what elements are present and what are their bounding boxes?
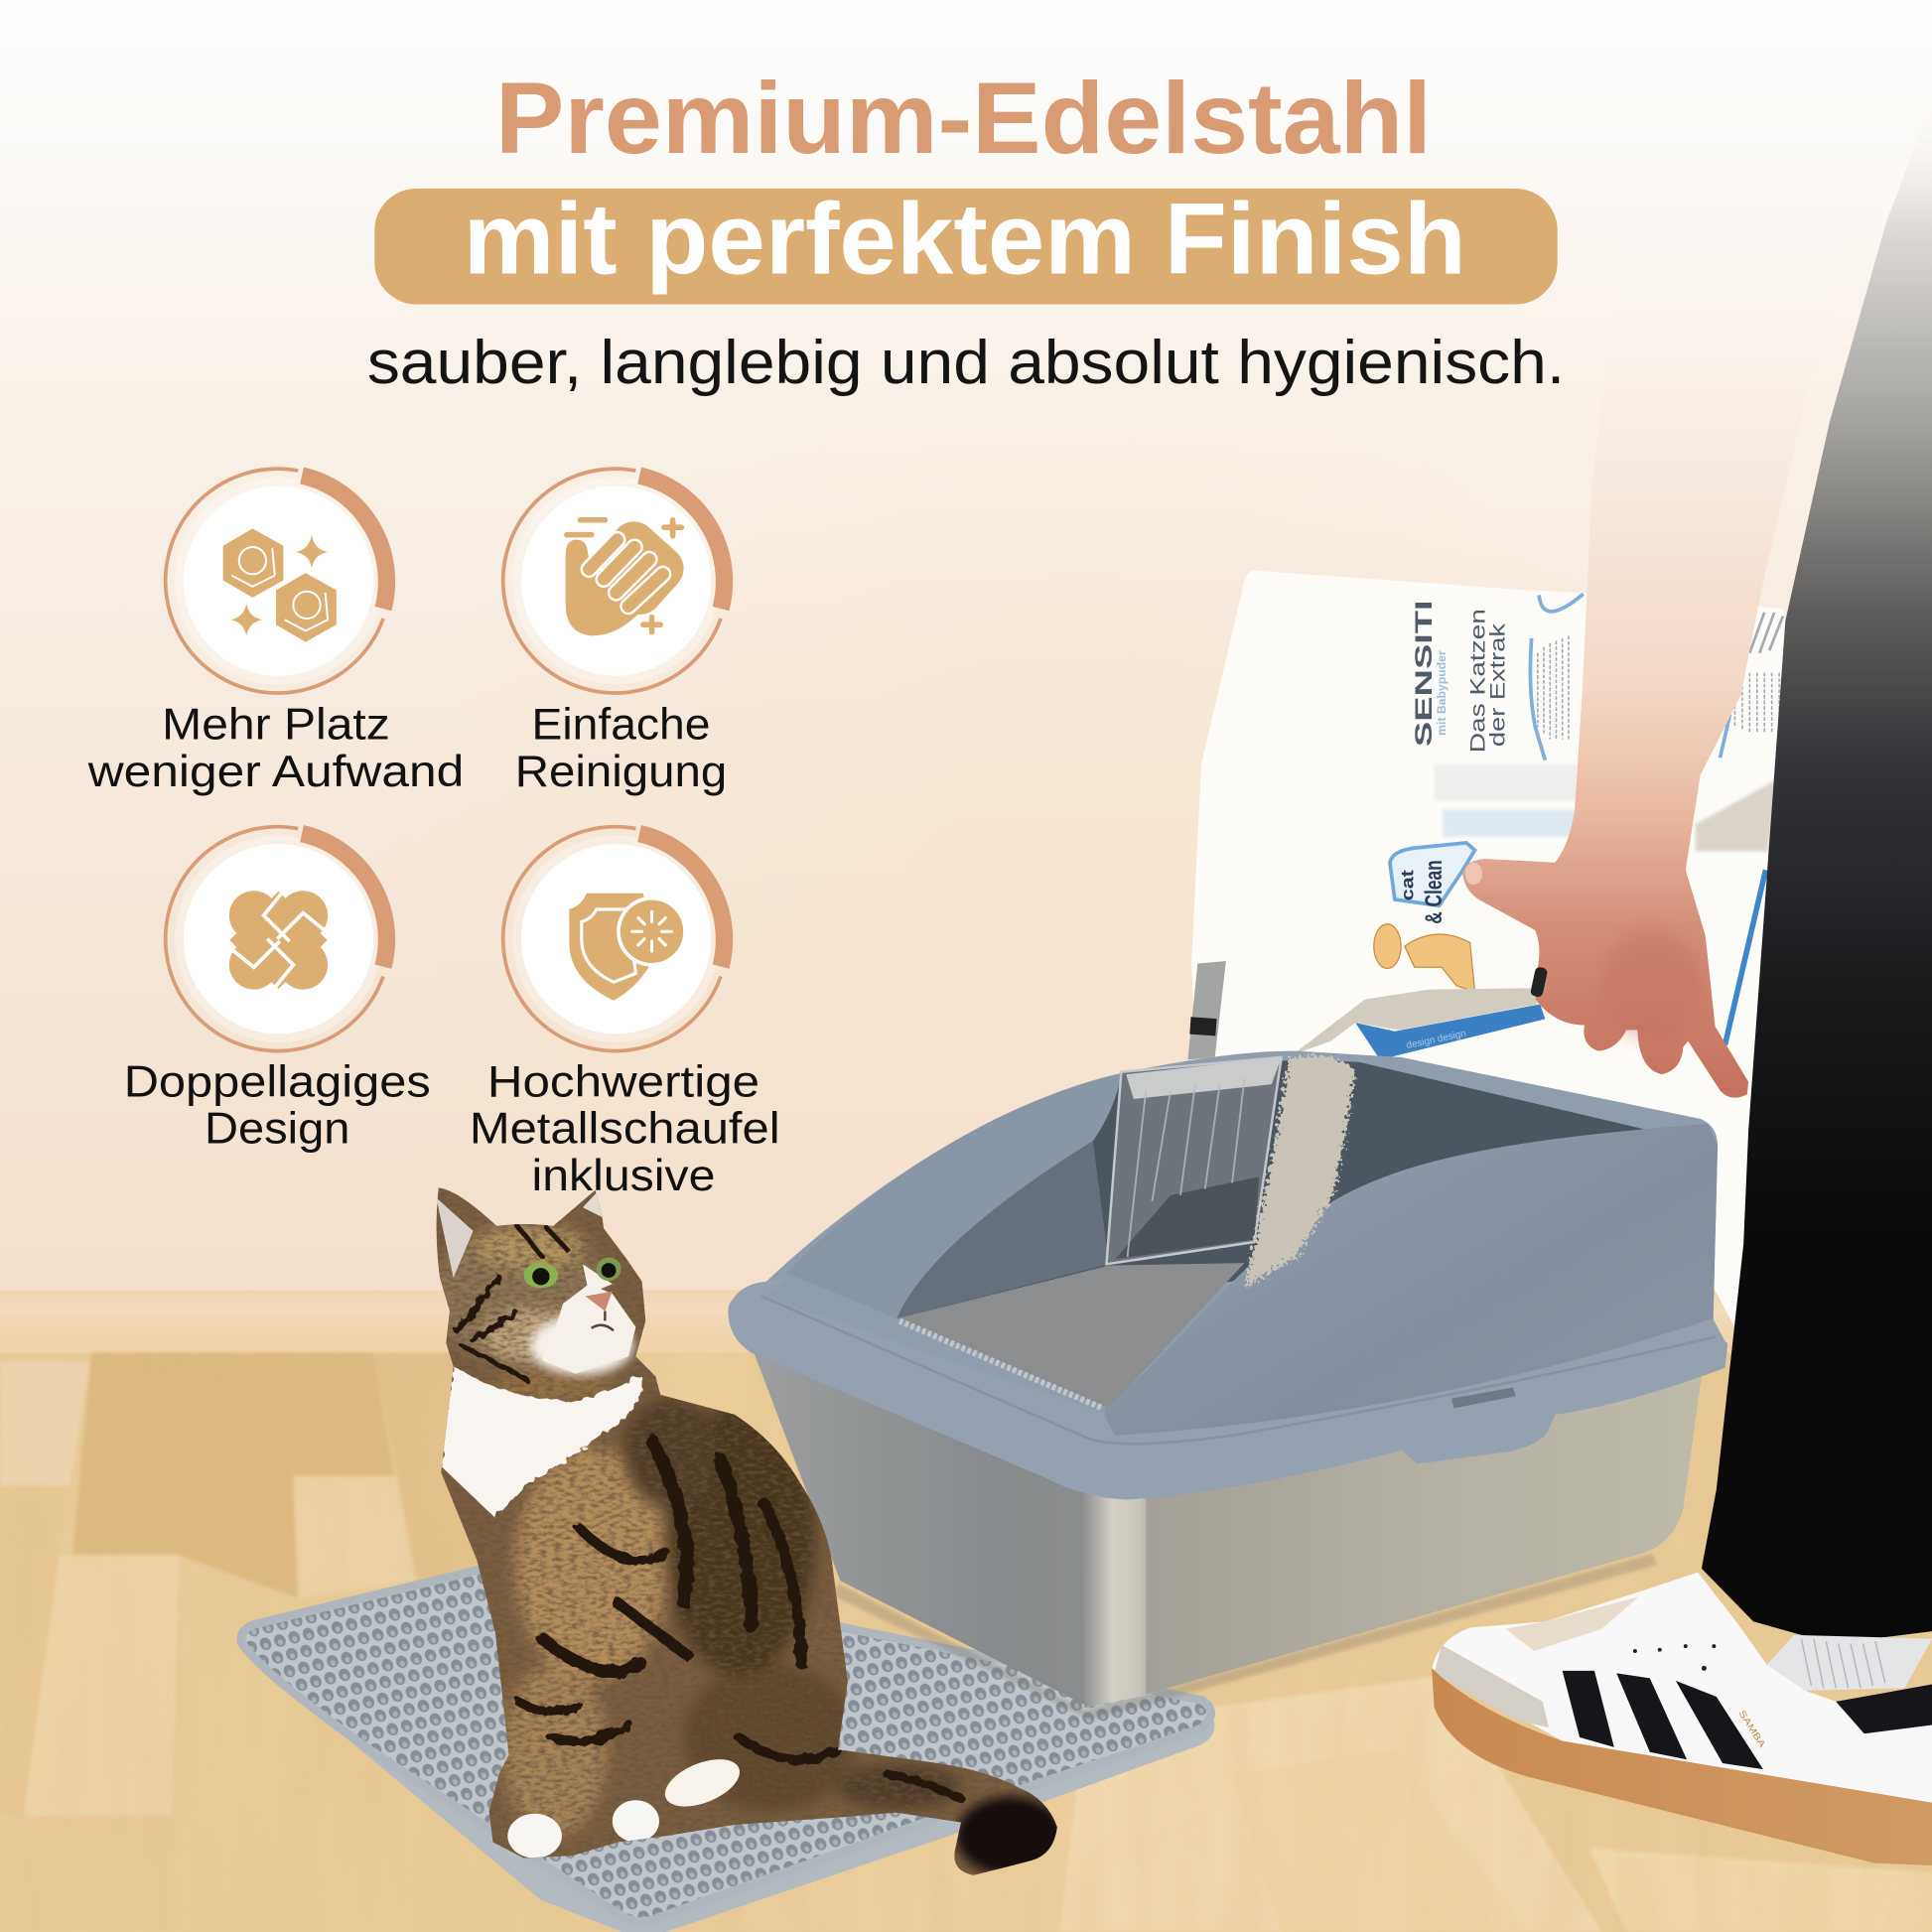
weave gaps <box>228 890 329 991</box>
sneaker sock <box>1767 1635 1932 1691</box>
bag printed brand text <box>1411 600 1509 753</box>
icon: shield with citrus badge <box>569 894 685 1001</box>
cat fur shading <box>431 1225 961 1836</box>
scoop shiny tines <box>1126 1057 1282 1099</box>
lid outer <box>728 1051 1727 1499</box>
white paws <box>507 1814 562 1859</box>
steel base left face <box>755 1353 1097 1708</box>
sneaker <box>1432 1573 1932 1865</box>
label: Doppellagiges <box>124 1058 431 1107</box>
bag printed brand text: mit Babypuder <box>1435 650 1449 736</box>
palm <box>566 540 647 635</box>
lid interior left lighter wall <box>897 1141 1109 1318</box>
person trousers <box>1702 102 1932 1644</box>
sneaker upper <box>1432 1573 1932 1803</box>
label: Einfache <box>532 701 710 750</box>
bag sand heap <box>1293 988 1538 1054</box>
background: wall <box>0 0 1932 1307</box>
tagline: sauber, langlebig und absolut hygienisch. <box>367 329 1565 397</box>
cat and clean logo: & Clean <box>1421 860 1447 924</box>
white muzzle <box>542 1284 635 1374</box>
litter box <box>728 961 1727 1721</box>
lid hood inner band <box>786 1074 1121 1318</box>
bag blue edge line <box>1725 870 1765 1044</box>
icon: hexagon nuts and sparkles <box>223 528 337 642</box>
lid clip slot <box>1451 1387 1516 1409</box>
hand shading <box>1601 929 1701 1042</box>
bag printed brand text: der Extrak <box>1486 622 1509 747</box>
bag body <box>1191 571 1790 1082</box>
lid interior dark wall <box>897 1059 1652 1318</box>
cloth <box>581 512 693 623</box>
bag label bands <box>1435 763 1578 837</box>
sneaker heel tab <box>1836 1685 1932 1733</box>
label second line: Reinigung <box>515 748 727 796</box>
label third line: inklusive <box>532 1152 715 1200</box>
mat top layer <box>241 1570 1211 1922</box>
scoop handle <box>1187 961 1226 1059</box>
background: skirting board <box>0 1290 1932 1354</box>
mat lower layer <box>241 1651 1214 1932</box>
feature: Doppellagiges Design <box>124 827 431 1154</box>
door mat <box>241 1570 1214 1932</box>
litter bag <box>1191 571 1790 1082</box>
label second line: Metallschaufel <box>470 1105 780 1154</box>
white backdrop behind the bag <box>1191 571 1790 1355</box>
bag blue stripes and small print <box>1530 594 1729 760</box>
cartoon cat on bag <box>1374 924 1475 992</box>
feature: Hochwertige Metallschaufel <box>470 827 780 1200</box>
icon: hand wiping with cloth <box>566 512 693 635</box>
icon: woven knot <box>228 890 329 991</box>
bag sand showing through <box>1696 778 1778 852</box>
bag printed brand text: Das Katzen <box>1466 609 1489 753</box>
lid front hood wall <box>1104 1124 1718 1484</box>
lid rim front <box>728 1277 1727 1499</box>
label: Hochwertige <box>487 1058 759 1107</box>
scoop mesh floor <box>1115 1176 1259 1259</box>
box floor <box>897 1263 1244 1409</box>
scoop in box <box>1106 961 1282 1264</box>
lid rim shadow line <box>761 1297 1716 1444</box>
tabby cat <box>437 1187 1057 1875</box>
label: Mehr Platz <box>162 701 390 750</box>
sneaker toe suede <box>1435 1645 1549 1727</box>
tabby stripes <box>457 1226 961 1799</box>
icon ring <box>166 469 386 693</box>
icon ring <box>503 827 725 1051</box>
scoop handle grip <box>1189 1017 1217 1035</box>
soft white chin <box>530 1315 633 1375</box>
cat and clean logo: cat <box>1398 870 1418 900</box>
label second line: weniger Aufwand <box>87 748 464 796</box>
sneaker lace eyelets <box>1633 1644 1716 1671</box>
cat eyes <box>523 1258 621 1289</box>
background: wooden floor <box>0 1353 1932 1932</box>
mesh strip at entry <box>899 1320 1103 1409</box>
person arm and hand <box>1462 123 1850 1098</box>
title: Premium-Edelstahl <box>495 62 1432 175</box>
feature: Mehr Platz <box>87 469 464 796</box>
fingers <box>589 540 663 607</box>
icon ring <box>166 827 386 1051</box>
top white fade <box>0 0 1932 246</box>
falling sand stream <box>1244 1055 1355 1288</box>
white face blaze <box>583 1265 613 1289</box>
steel base right face <box>1146 1368 1703 1694</box>
thumb nail <box>1465 863 1482 885</box>
white chest <box>441 1366 641 1518</box>
cat mouth <box>592 1311 614 1330</box>
bag printed brand text: SENSITI <box>1411 600 1437 747</box>
bag small print on blue lip: design design <box>1406 1029 1467 1051</box>
steel base corner highlight <box>1082 1484 1159 1708</box>
motion lines and plus signs <box>567 520 681 632</box>
wood grain <box>0 1353 1932 1932</box>
ear inner <box>436 1197 474 1278</box>
black tail tip <box>956 1796 1064 1875</box>
label second line: Design <box>205 1105 349 1154</box>
cat fine fur texture <box>437 1188 1056 1873</box>
sneaker black stripes <box>1563 1671 1763 1769</box>
feature: Einfache Reinigung <box>503 469 727 796</box>
icon ring <box>503 469 725 693</box>
white belly patch <box>665 1759 740 1807</box>
box shadow on floor <box>833 1554 1657 1721</box>
scoop blade <box>1106 1057 1282 1264</box>
black strip under hand <box>1530 966 1548 998</box>
cat nose <box>586 1292 613 1311</box>
sneaker tongue tan area <box>1506 1596 1639 1651</box>
sneaker gum sole <box>1432 1668 1932 1865</box>
sneaker brand text: SAMBA <box>1736 1709 1768 1750</box>
cat and clean logo <box>1374 843 1475 992</box>
background: warm wall glow <box>321 357 1701 1417</box>
bag lower edge at pouring point <box>1355 1004 1545 1059</box>
cat base fur <box>437 1187 1057 1875</box>
subtitle pill: mit perfektem Finish <box>464 183 1466 296</box>
